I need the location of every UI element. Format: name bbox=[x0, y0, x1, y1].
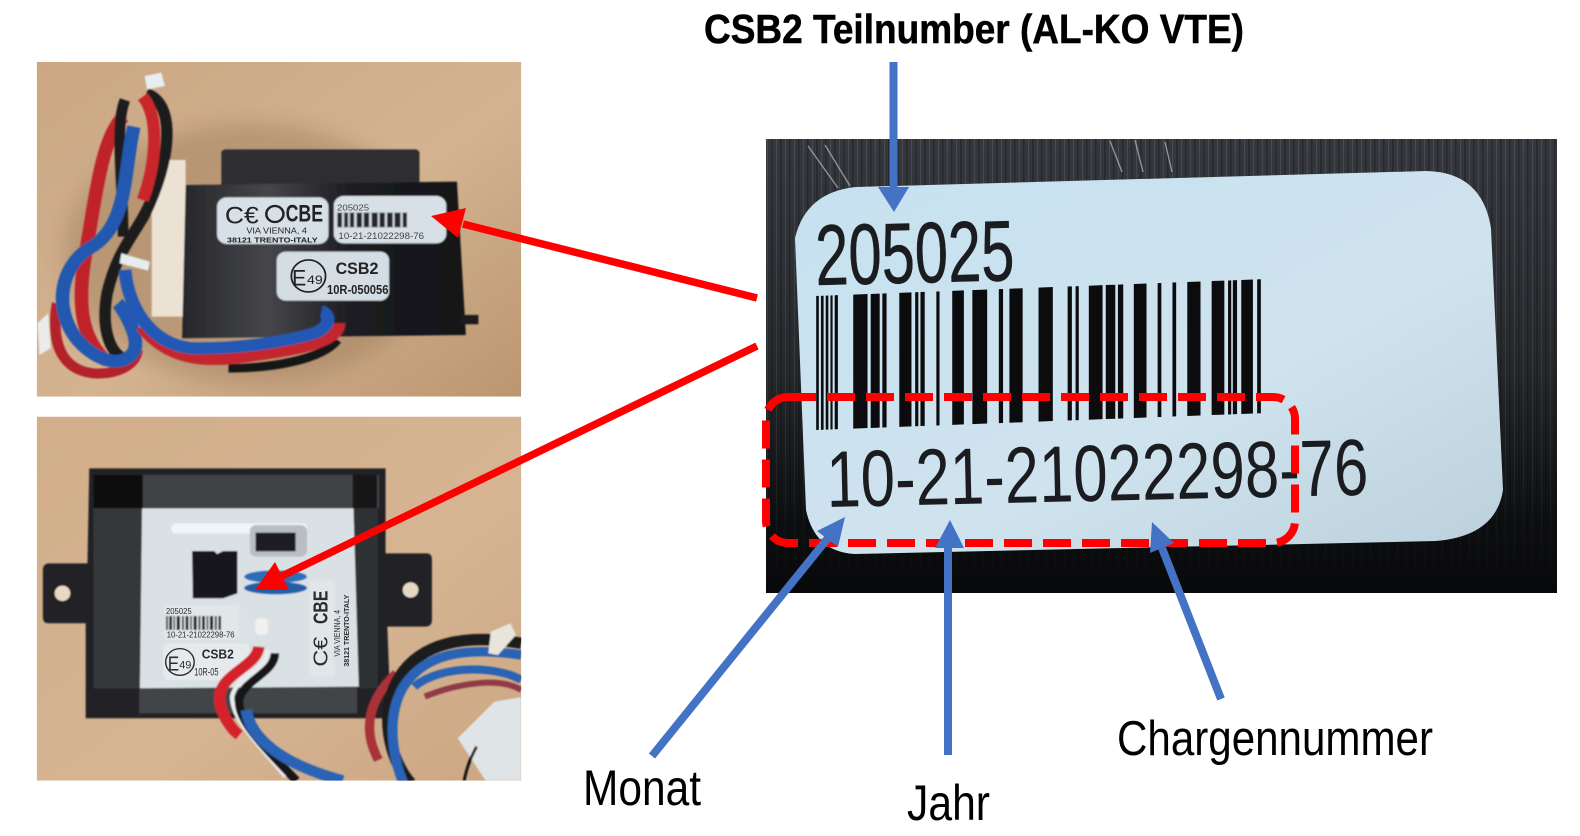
label text: CE and CBE bbox=[225, 200, 424, 297]
interior label text: 10-21-21022298-76 bbox=[167, 631, 235, 639]
batch code on sticker: 10-21-21022298-76 bbox=[825, 423, 1369, 524]
interior label text: VIA VIENNA, 4 bbox=[333, 610, 342, 657]
label: Jahr: Jahr bbox=[907, 775, 990, 831]
blue arrow: batch number bbox=[1150, 522, 1221, 699]
title: CSB2 Teilnumber (AL-KO VTE) bbox=[704, 6, 1244, 52]
interior label text: 38121 TRENTO-ITALY bbox=[344, 594, 351, 667]
label text: CE and CBE: E bbox=[292, 265, 306, 290]
red arrow to upper photo bbox=[431, 208, 757, 298]
label: Chargennummer: Chargennummer bbox=[1117, 712, 1433, 766]
label text: CE and CBE: VIA VIENNA, 4 bbox=[246, 226, 307, 235]
interior label text: 49 bbox=[179, 660, 191, 672]
label text: CE and CBE: 49 bbox=[307, 273, 323, 287]
blue arrow: part number bbox=[878, 62, 909, 212]
interior label text: C€ bbox=[311, 636, 333, 667]
blue arrow: year bbox=[935, 520, 964, 755]
label text: CE and CBE: CBE bbox=[286, 200, 323, 227]
interior label text bbox=[166, 591, 351, 678]
label text: CE and CBE: 10-21-21022298-76 bbox=[338, 231, 424, 242]
photo: label close-up bbox=[766, 139, 1557, 593]
interior label text: CSB2 bbox=[202, 646, 234, 662]
interior label text: E bbox=[168, 653, 179, 675]
blue arrow: month bbox=[652, 517, 845, 756]
label text: CE and CBE: 38121 TRENTO-ITALY bbox=[227, 236, 318, 245]
part number on sticker: 205025 bbox=[814, 203, 1015, 304]
barcode bbox=[816, 279, 1261, 430]
label text: CE and CBE: CSB2 bbox=[336, 259, 378, 278]
label text: CE and CBE: 10R-050056 bbox=[327, 282, 388, 297]
label text: CE and CBE: C€ bbox=[225, 202, 259, 229]
label sticker bbox=[795, 171, 1503, 554]
dashed highlight around batch code bbox=[766, 397, 1295, 543]
interior label text: CBE bbox=[311, 591, 333, 624]
interior label text: 205025 bbox=[166, 606, 192, 616]
photo: module interior with potting bbox=[37, 417, 521, 783]
red arrow to lower photo bbox=[255, 346, 757, 590]
label text: CE and CBE: 205025 bbox=[337, 203, 369, 213]
photo: module front with labels bbox=[37, 62, 521, 397]
interior label text: 10R-05 bbox=[194, 667, 218, 678]
label: Monat: Monat bbox=[583, 760, 701, 816]
